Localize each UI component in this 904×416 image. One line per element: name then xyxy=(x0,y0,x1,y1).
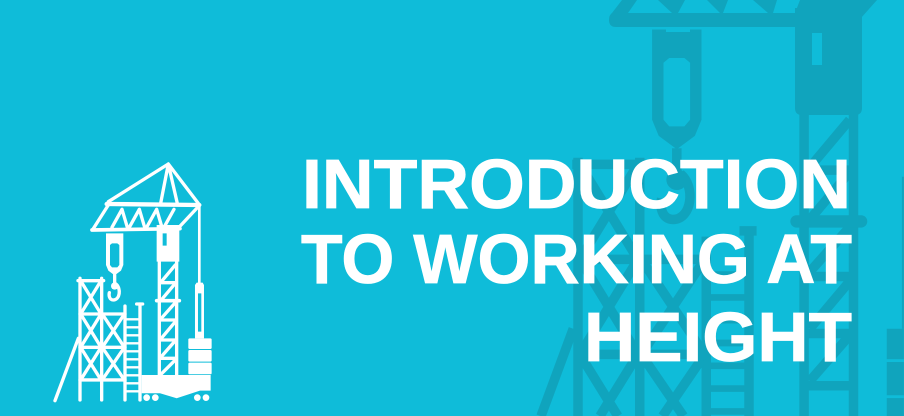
title xyxy=(301,145,852,376)
background watermark: large crane and scaffold xyxy=(541,0,904,416)
title line 1: INTRODUCTION xyxy=(302,145,851,223)
title line 2: TO WORKING AT xyxy=(301,220,852,298)
title line 3: HEIGHT xyxy=(584,298,852,376)
icon: crane and scaffold xyxy=(55,164,212,401)
